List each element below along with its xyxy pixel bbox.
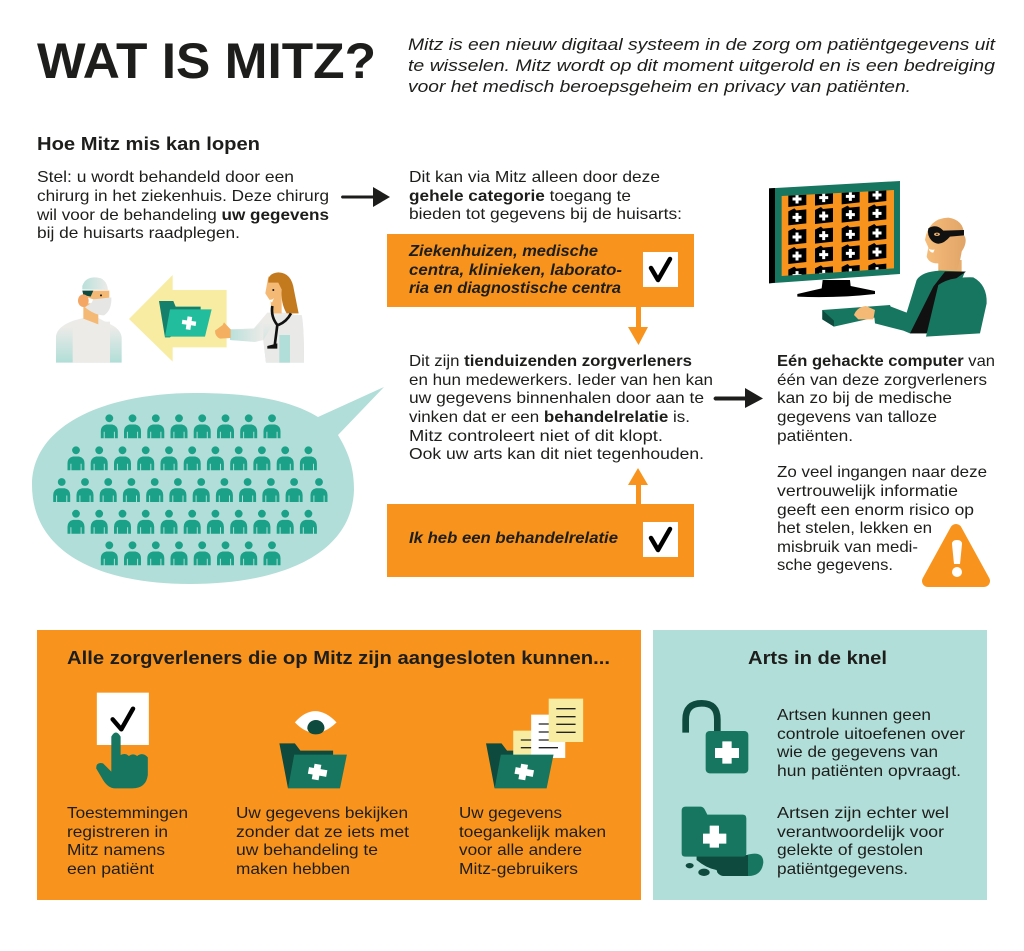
text: still responsible — [777, 805, 949, 878]
text: still responsible: Artsen zijn echter wel — [777, 805, 949, 822]
text: tens of thousands of providers: vinken dat er een behandelrelatie is. — [409, 409, 690, 426]
panel: all connected providers — [37, 630, 641, 900]
text: tens of thousands of providers: en hun medewerkers. Ieder van hen kan — [409, 372, 713, 389]
text: hacked computer — [777, 353, 995, 445]
text: tens of thousands of providers: Dit zijn tienduizenden zorgverleners — [409, 353, 692, 370]
text: risk: vertrouwelijk informatie — [777, 483, 958, 500]
text: still responsible: verantwoordelijk voor — [777, 824, 945, 841]
text: register consent: registreren in — [67, 824, 168, 841]
text: scenario: wil voor de behandeling uw gegevens — [36, 207, 329, 224]
title: WAT IS MITZ? — [37, 33, 376, 89]
text: view data: Uw gegevens bekijken — [236, 805, 408, 822]
text: tens of thousands of providers: Ook uw arts kan dit niet tegenhouden. — [409, 446, 704, 463]
text: still responsible: gelekte of gestolen — [777, 842, 923, 859]
intro text: voor het medisch beroepsgeheim en privacy van patiënten. — [408, 77, 911, 96]
keyboard — [822, 305, 893, 327]
orange box: categories: ria en diagnostische centra — [409, 280, 621, 297]
orange box: treatment relation — [387, 504, 694, 577]
text: risk: misbruik van medi- — [777, 539, 918, 556]
text: hacked computer: Eén gehackte computer van — [777, 353, 995, 370]
text: no control — [776, 707, 966, 780]
text: hacked computer: één van deze zorgverleners — [777, 372, 987, 389]
icon: leaking folder — [682, 807, 763, 876]
panel heading: Arts in de knel — [748, 648, 887, 668]
arrow: providers to hacked computer — [714, 388, 763, 408]
text: still responsible: patiëntgegevens. — [777, 861, 908, 878]
text: scenario: chirurg in het ziekenhuis. Deze chirurg — [37, 188, 329, 205]
text: category access: Dit kan via Mitz alleen door deze — [409, 169, 660, 186]
text: hacked computer: kan zo bij de medische — [777, 390, 952, 407]
text: no control: Artsen kunnen geen — [777, 707, 931, 724]
text: register consent: Mitz namens — [67, 842, 165, 859]
text: share data: voor alle andere — [459, 842, 582, 859]
text: category access: bieden tot gegevens bij de huisarts: — [409, 206, 682, 223]
icon: folder with documents — [486, 699, 583, 788]
text: risk — [777, 464, 987, 574]
panel: doctors in a bind — [653, 630, 987, 900]
text: view data: maken hebben — [236, 861, 350, 878]
text: share data: Mitz-gebruikers — [459, 861, 578, 878]
text: category access: gehele categorie toegang te — [409, 188, 631, 205]
text: no control: wie de gegevens van — [776, 744, 938, 761]
orange box: categories — [387, 234, 694, 307]
arrow: scenario to category — [341, 187, 390, 207]
text: hacked computer: gegevens van talloze — [777, 409, 937, 426]
icon: warning triangle — [928, 530, 984, 581]
icon: eye above folder — [279, 711, 347, 788]
heading: hoe Mitz mis kan lopen: Hoe Mitz mis kan lopen — [37, 134, 260, 154]
text: risk: sche gegevens. — [777, 557, 893, 574]
icon: green folder — [159, 301, 212, 337]
text: scenario: Stel: u wordt behandeld door een — [37, 169, 294, 186]
icon: hand ticking checkbox — [96, 693, 149, 788]
text: view data: uw behandeling te — [236, 842, 378, 859]
arrow: orange up — [628, 468, 648, 504]
bubble — [32, 387, 384, 584]
text: no control: hun patiënten opvraagt. — [777, 763, 961, 780]
text: scenario: bij de huisarts raadplegen. — [37, 225, 240, 242]
text: hacked computer: patiënten. — [777, 428, 853, 445]
text: tens of thousands of providers — [409, 353, 713, 463]
illustration: hacker at monitor — [769, 181, 987, 337]
surgeon — [56, 277, 122, 363]
checkbox — [643, 522, 678, 557]
monitor — [769, 181, 900, 297]
text: risk: het stelen, lekken en — [777, 520, 932, 537]
text: share data: Uw gegevens — [459, 805, 562, 822]
hacker — [854, 218, 987, 337]
orange box: categories: Ziekenhuizen, medische — [408, 243, 598, 260]
intro text: Mitz is een nieuw digitaal systeem in de zorg om patiëntgegevens uit — [408, 35, 996, 54]
text: category access — [409, 169, 682, 223]
orange box: categories: centra, klinieken, laborato- — [409, 262, 622, 279]
intro text — [408, 35, 996, 96]
text: register consent — [67, 805, 188, 878]
text: tens of thousands of providers: Mitz controleert niet of dit klopt. — [409, 428, 663, 445]
arrow: orange down — [628, 307, 648, 345]
panel heading: Alle zorgverleners die op Mitz zijn aangesloten kunnen... — [67, 648, 610, 668]
illustration: surgeon, folder and doctor — [56, 272, 304, 363]
text: view data: zonder dat ze iets met — [236, 824, 410, 841]
text: risk: Zo veel ingangen naar deze — [777, 464, 987, 481]
text: no control: controle uitoefenen over — [777, 726, 966, 743]
text: share data: toegankelijk maken — [459, 824, 606, 841]
text: view data — [236, 805, 410, 878]
arrow: yellow transfer arrow — [129, 275, 227, 362]
speech bubble with crowd of care providers — [32, 387, 384, 584]
icon: open padlock — [686, 703, 748, 773]
crowd — [53, 414, 327, 565]
doctor — [215, 272, 304, 363]
orange box: treatment relation: Ik heb een behandelrelatie — [409, 530, 618, 547]
text: scenario — [36, 169, 329, 242]
text: risk: geeft een enorm risico op — [777, 502, 974, 519]
intro text: te wisselen. Mitz wordt op dit moment uitgerold en is een bedreiging — [408, 56, 996, 75]
text: share data — [459, 805, 606, 878]
checkbox — [643, 252, 678, 287]
text: register consent: Toestemmingen — [67, 805, 188, 822]
text: tens of thousands of providers: uw gegevens binnenhalen door aan te — [409, 390, 704, 407]
text: register consent: een patiënt — [67, 861, 155, 878]
